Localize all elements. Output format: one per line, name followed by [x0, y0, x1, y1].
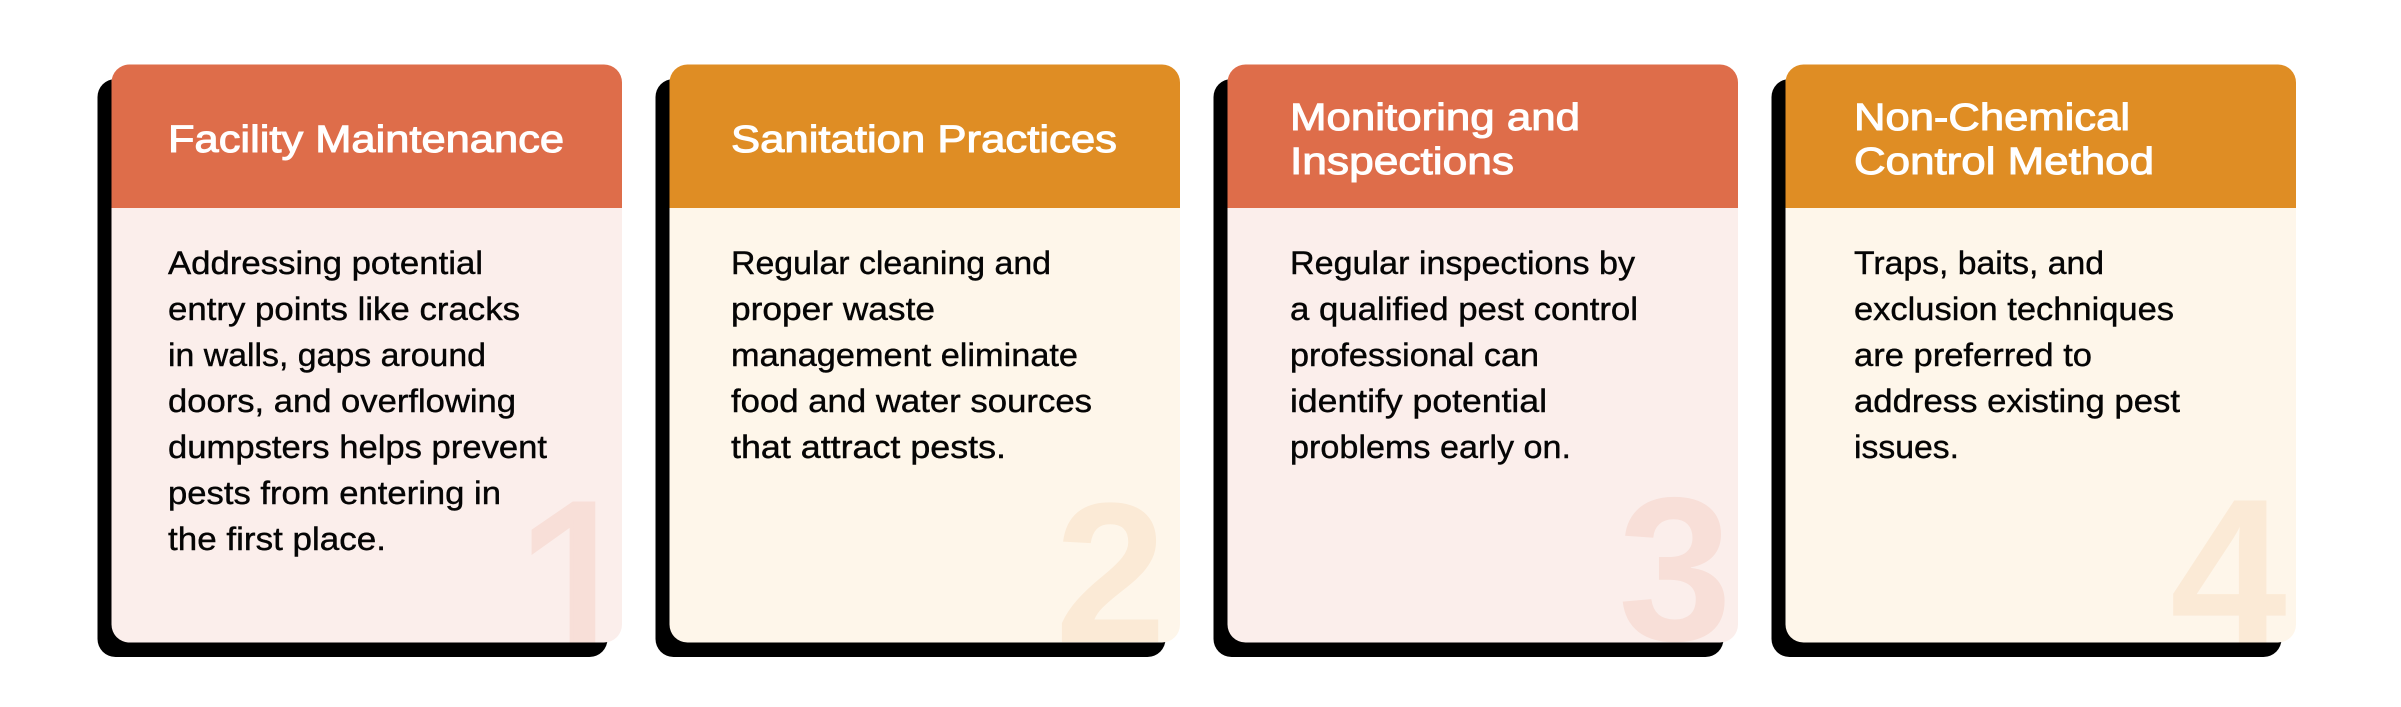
- body text: dumpsters helps prevent: [168, 429, 547, 465]
- card shadow: [656, 79, 1166, 657]
- card body: [670, 64, 1180, 642]
- body text: [731, 245, 1092, 465]
- card body: [1786, 64, 2296, 642]
- body text: Addressing potential: [168, 245, 483, 281]
- body text: [168, 245, 547, 557]
- body text: exclusion techniques: [1854, 291, 2174, 327]
- big number 4: 4: [2170, 455, 2287, 690]
- body text: address existing pest: [1854, 383, 2180, 419]
- body text: entry points like cracks: [168, 291, 520, 327]
- big number 2: 2: [1055, 462, 1166, 685]
- card shadow: [1772, 79, 2282, 657]
- body text: Regular cleaning and: [731, 245, 1051, 281]
- infographic: four numbered cards: [98, 64, 2296, 657]
- heading line 2: Inspections: [1290, 141, 1514, 183]
- body text: food and water sources: [731, 383, 1092, 419]
- body text: a qualified pest control: [1290, 291, 1638, 327]
- heading line 2: Control Method: [1854, 141, 2154, 183]
- heading: Non-Chemical: [1854, 97, 2130, 139]
- body text: problems early on.: [1290, 429, 1571, 465]
- heading: Monitoring and: [1290, 97, 1580, 139]
- card shadow: [98, 79, 608, 657]
- body text: issues.: [1854, 429, 1959, 465]
- body text: professional can: [1290, 337, 1539, 373]
- body text: management eliminate: [731, 337, 1078, 373]
- body text: proper waste: [731, 291, 935, 327]
- body text: Regular inspections by: [1290, 245, 1635, 281]
- card header: [112, 64, 622, 208]
- body text: identify potential: [1290, 383, 1547, 419]
- body text: [1290, 245, 1638, 465]
- card header: [1228, 64, 1738, 208]
- panel: Sanitation Practices: [656, 64, 1180, 685]
- body text: [1854, 245, 2180, 465]
- body text: Traps, baits, and: [1854, 245, 2104, 281]
- body text: that attract pests.: [731, 429, 1006, 465]
- card body: [1228, 64, 1738, 642]
- body text: in walls, gaps around: [168, 337, 486, 373]
- panel: Monitoring and Inspections: [1214, 64, 1738, 684]
- body text: pests from entering in: [168, 475, 501, 511]
- body text: are preferred to: [1854, 337, 2092, 373]
- panel: Non-Chemical Control Method: [1772, 64, 2296, 690]
- card header: [670, 64, 1180, 208]
- heading: Facility Maintenance: [168, 119, 564, 161]
- heading: Sanitation Practices: [731, 119, 1117, 161]
- panel: Facility Maintenance: [98, 64, 622, 657]
- body text: the first place.: [168, 521, 386, 557]
- big number 3: 3: [1618, 455, 1732, 684]
- card shadow: [1214, 79, 1724, 657]
- card header: [1786, 64, 2296, 208]
- body text: doors, and overflowing: [168, 383, 516, 419]
- card body: [112, 64, 622, 642]
